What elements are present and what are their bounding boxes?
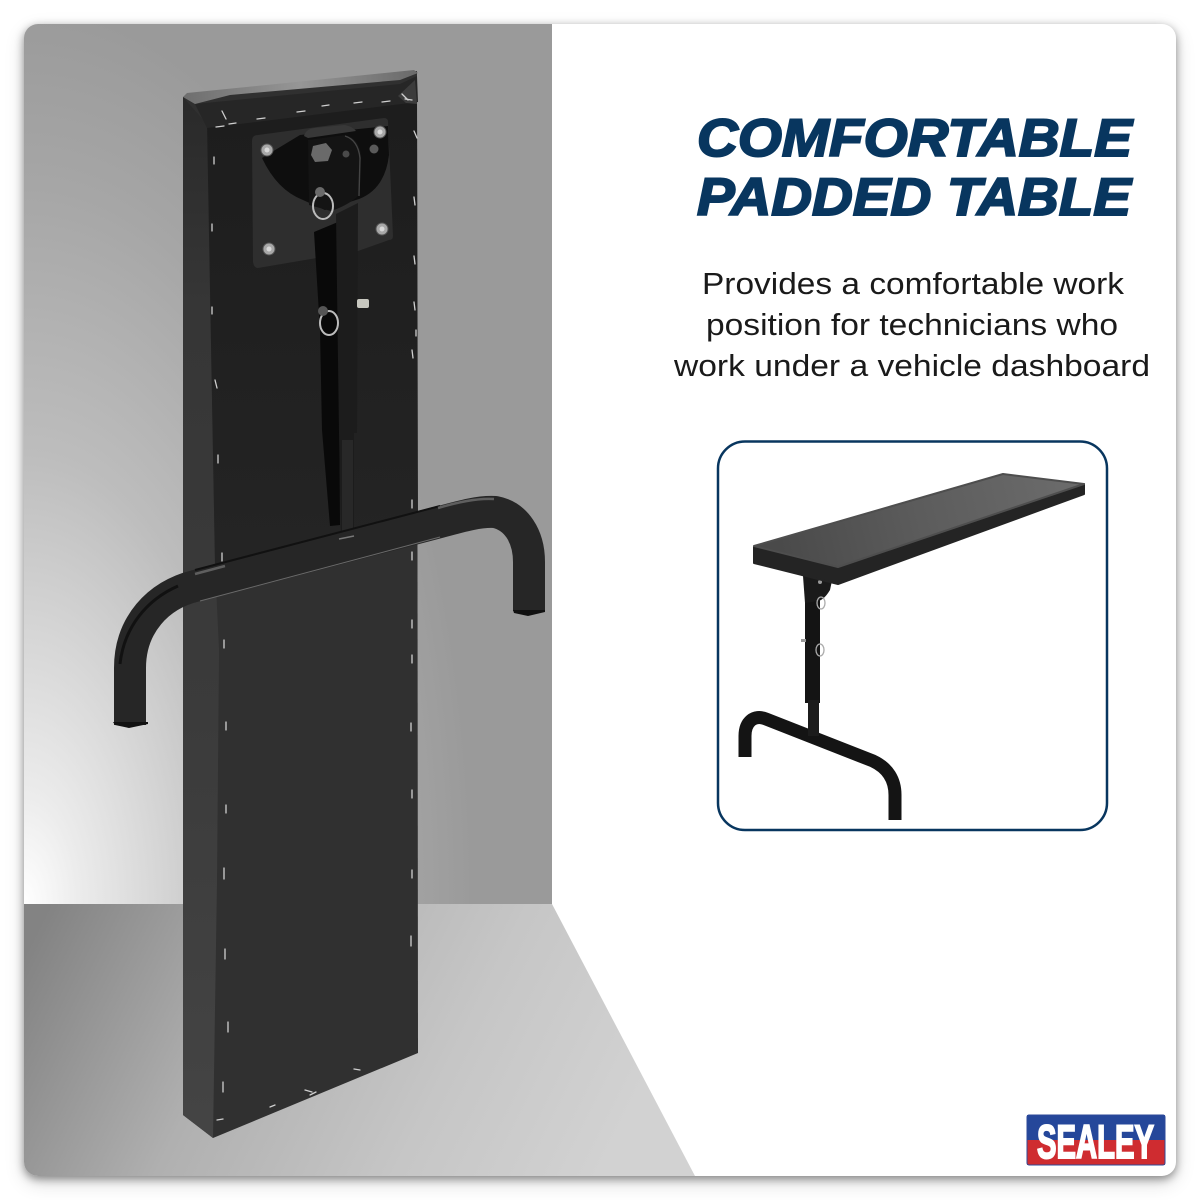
- vertical post: [314, 222, 340, 526]
- hinge plate: [309, 202, 350, 211]
- board side padding: [183, 473, 219, 1138]
- mounting bracket: [252, 118, 393, 540]
- heading: COMFORTABLE: [697, 109, 1134, 168]
- heading: [697, 109, 1134, 227]
- hinge lobes: [262, 126, 389, 210]
- locating pin: [357, 299, 369, 308]
- padded board: [183, 70, 418, 1138]
- description text: position for technicians who: [706, 307, 1118, 342]
- heading: PADDED TABLE: [697, 168, 1133, 227]
- pull ring upper: [313, 193, 333, 219]
- pull ring lower: [320, 311, 338, 335]
- bolts: [261, 126, 388, 255]
- inset frame: [718, 442, 1107, 830]
- floor: [24, 904, 695, 1176]
- table stand: [745, 576, 895, 820]
- board top edge: [183, 70, 418, 104]
- description text: work under a vehicle dashboard: [673, 348, 1150, 383]
- plate: [252, 118, 393, 268]
- description text: Provides a comfortable work: [702, 266, 1125, 301]
- table pad: [754, 474, 1084, 584]
- inset panel: assembled table: [718, 442, 1107, 830]
- staples: [212, 94, 417, 1120]
- upper panel: [207, 100, 418, 566]
- description text: [673, 266, 1150, 383]
- tubular base frame: [113, 499, 545, 728]
- wall: [24, 24, 552, 904]
- centre bolt: [311, 143, 332, 162]
- photo panel: grey room with padded board: [24, 24, 695, 1176]
- board body: [183, 71, 418, 1138]
